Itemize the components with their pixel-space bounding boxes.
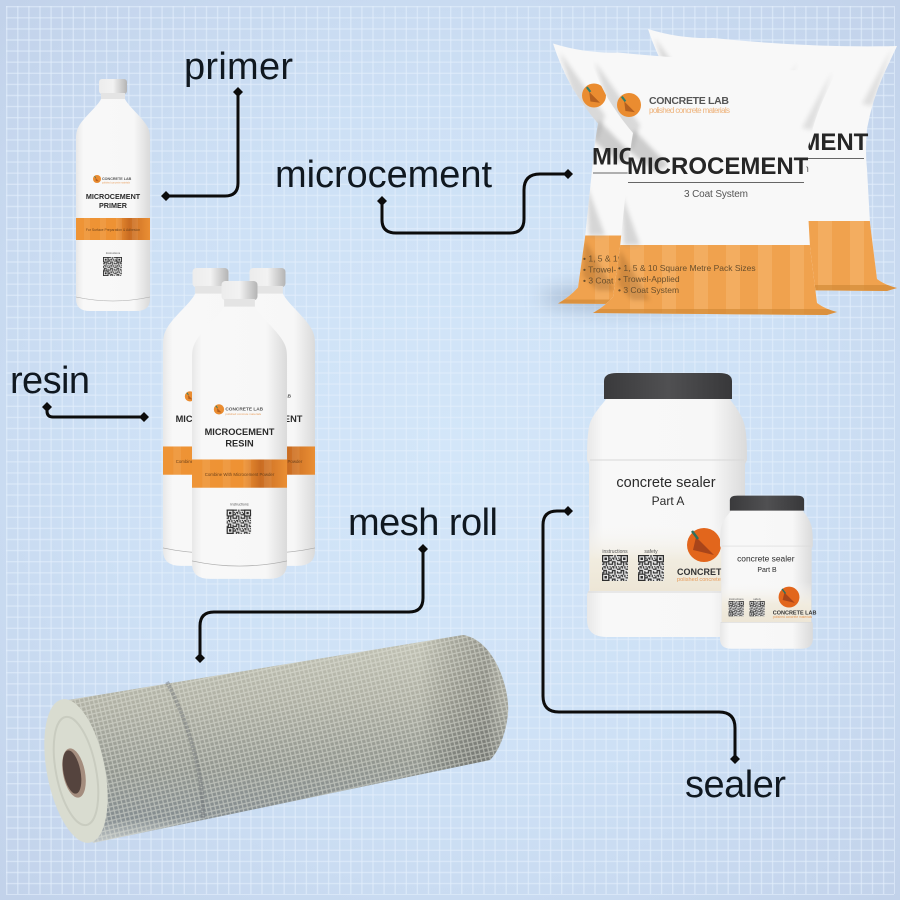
subtitle: 3 Coat System (684, 189, 748, 200)
roll body (68, 635, 508, 843)
roll core (58, 746, 90, 800)
product: primer bottle: polished concrete materials (102, 182, 131, 184)
sealer part A jar: instructions (602, 549, 628, 555)
brand tagline: polished concrete materials (649, 106, 730, 115)
label: mesh roll: mesh roll (348, 502, 498, 544)
product: primer bottle: MICROCEMENT (86, 192, 141, 201)
back right bottle (220, 268, 315, 566)
back right bag: 3 Coat System (743, 164, 809, 175)
product: primer bottle: Instructions (106, 251, 121, 255)
connector: resin (42, 402, 149, 422)
product: primer bottle: PRIMER (99, 201, 128, 210)
back right bottle: CONCRETE LAB (253, 394, 292, 400)
roll seam (167, 682, 203, 818)
product: microcement bags (540, 29, 900, 320)
sealer part B jar: polished concrete materials (773, 615, 813, 619)
front bottle: RESIN (225, 439, 254, 449)
back right bag: MICROCEMENT (687, 129, 869, 156)
back left bag: • 3 Coat System (583, 276, 644, 286)
front bottle: CONCRETE LAB (225, 407, 264, 413)
back right bottle: MICROCEMENT (233, 414, 303, 424)
sealer part B jar: instructions (729, 597, 744, 601)
brand logo (617, 93, 641, 117)
front bottle: Instructions (230, 503, 249, 507)
connector: primer (161, 87, 243, 201)
front bag (585, 53, 845, 320)
sealer part A jar: concrete sealer (616, 475, 716, 491)
product: resin bottles (163, 268, 315, 579)
label: microcement: microcement (275, 154, 492, 196)
connector: mesh roll (195, 544, 428, 663)
sealer part B jar: CONCRETE LAB (773, 610, 817, 616)
product: mesh roll (34, 635, 508, 848)
product: primer bottle: For Surface Preparation & Adhesion (86, 228, 140, 232)
sealer part B jar: Part B (757, 567, 777, 574)
product: sealer jars (587, 373, 817, 649)
bullet list: • Trowel-Applied (618, 274, 680, 284)
bullet list: • 1, 5 & 10 Square Metre Pack Sizes (618, 263, 756, 273)
back left bottle (163, 268, 258, 566)
back left bag: • Trowel-Applied (583, 264, 645, 274)
label: sealer: sealer (685, 764, 786, 806)
product name: MICROCEMENT (627, 153, 809, 180)
sealer part A jar: safety (644, 549, 658, 555)
back left bottle: Combine With Microcement Powder (176, 459, 246, 464)
front bottle: MICROCEMENT (205, 427, 275, 437)
sealer part A jar: polished concrete materials (677, 577, 745, 583)
bag shadow (540, 285, 710, 311)
back left bag: • 1, 5 & 10 Square Metre Pack Sizes (583, 254, 721, 264)
back right bag (645, 29, 900, 296)
connector: sealer (543, 506, 740, 764)
front bottle: Combine With Microcement Powder (205, 472, 275, 477)
connector: microcement (377, 169, 573, 233)
back left bag (550, 44, 810, 310)
brand name: CONCRETE LAB (649, 95, 729, 107)
sealer part B jar (720, 496, 817, 649)
sealer part A jar (587, 373, 749, 637)
sealer part B jar: safety (753, 597, 762, 601)
front bottle: polished concrete materials (225, 412, 262, 416)
sealer part A jar: CONCRETE LAB (677, 567, 749, 577)
back left bag: MICROCEMENT (592, 144, 774, 170)
roll end (34, 694, 118, 848)
back left bottle: MICROCEMENT (176, 414, 246, 424)
label: primer: primer (184, 46, 293, 88)
product: primer bottle (76, 79, 150, 311)
front bottle (192, 281, 287, 579)
label: resin: resin (10, 360, 90, 402)
sealer part B jar: concrete sealer (737, 554, 795, 564)
bullet list: • 3 Coat System (618, 285, 679, 295)
back right bottle: Combine With Microcement Powder (233, 459, 303, 464)
product: primer bottle: CONCRETE LAB (102, 177, 132, 181)
sealer part A jar: Part A (652, 494, 684, 508)
